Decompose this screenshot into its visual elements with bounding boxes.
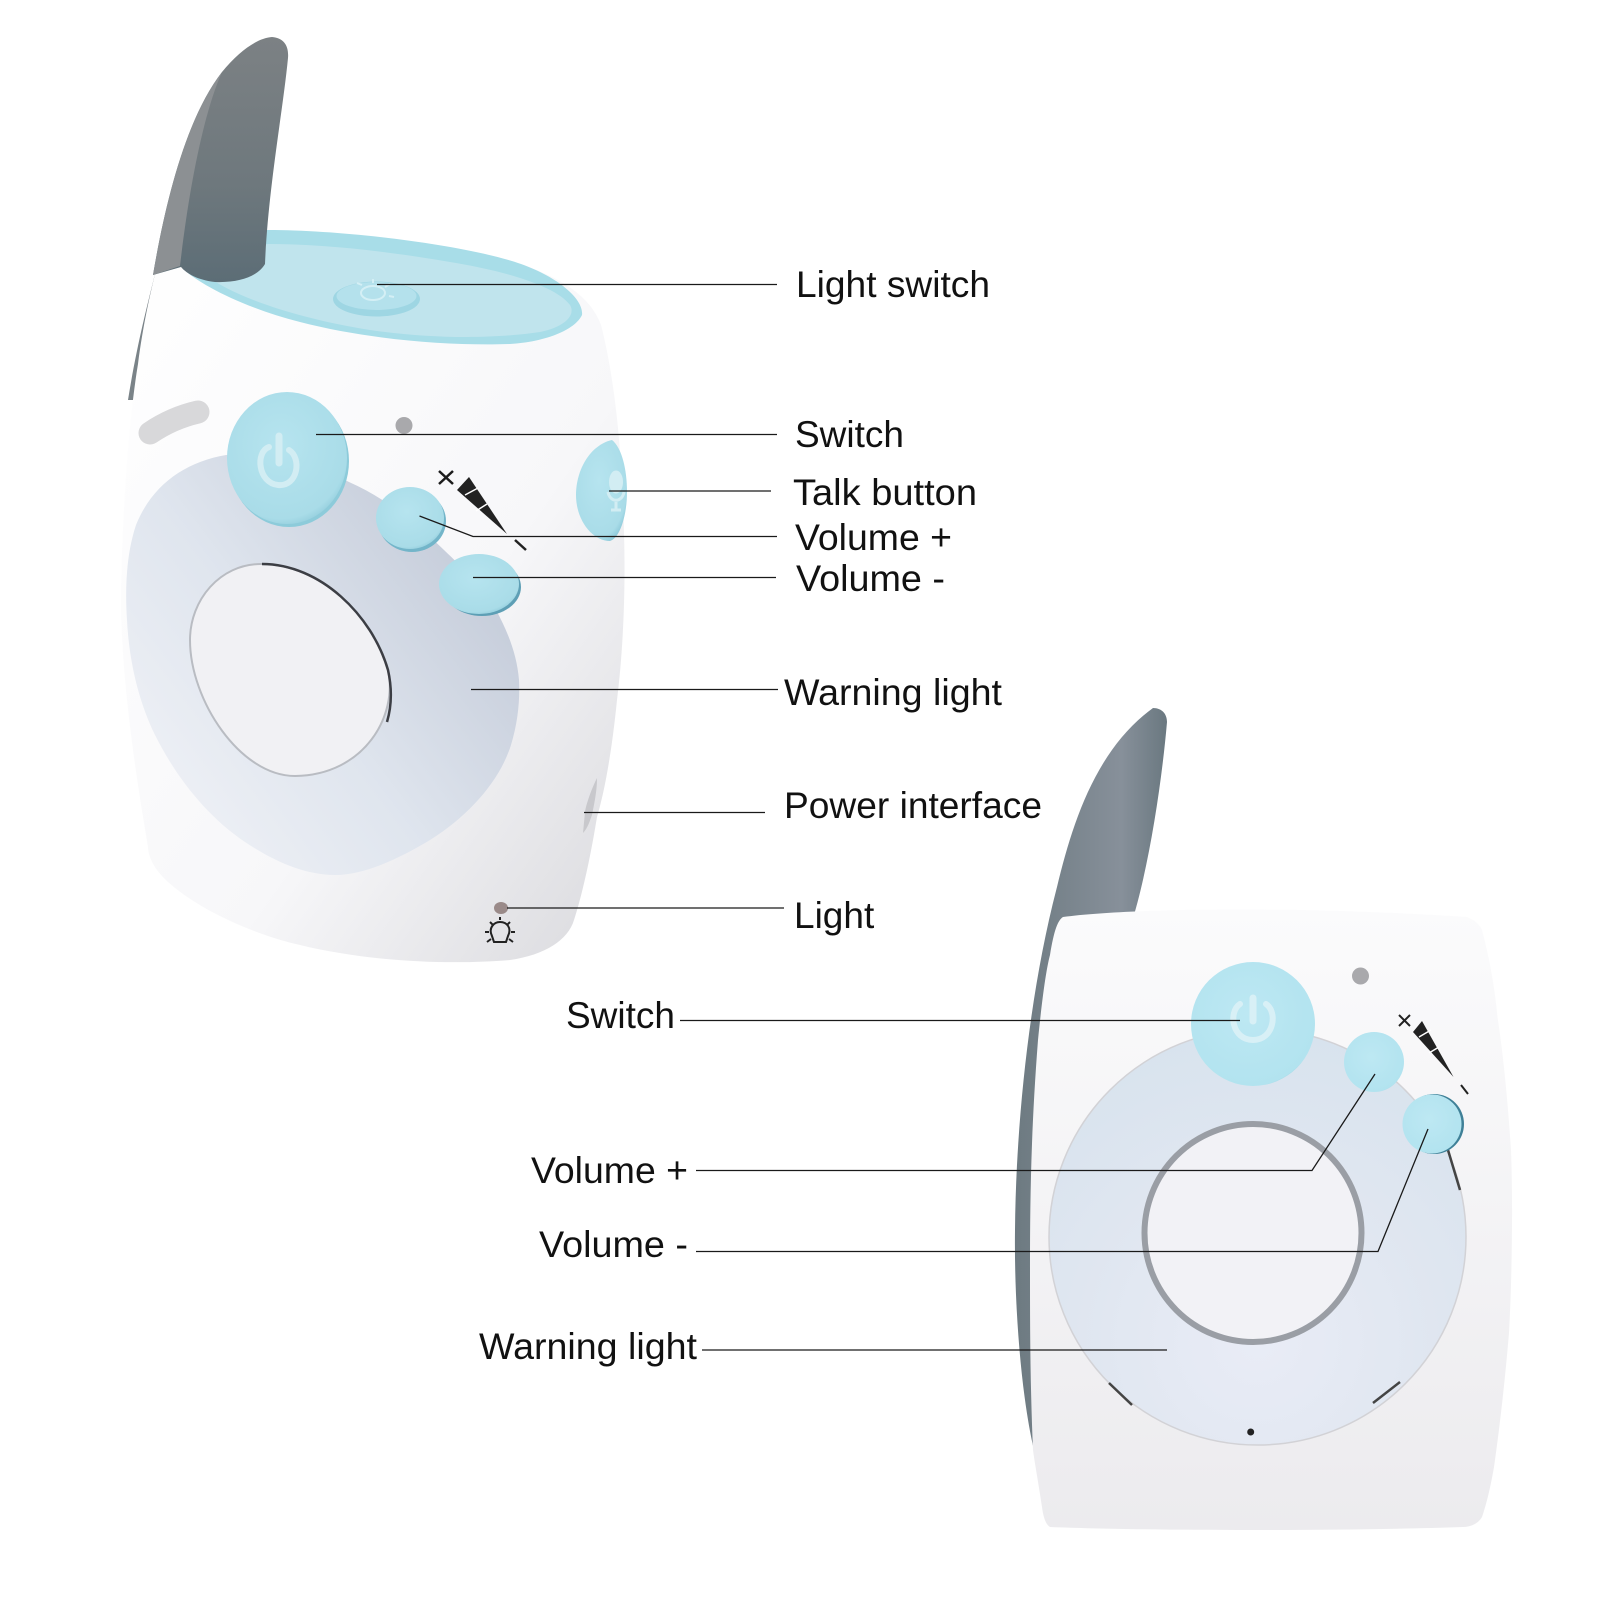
talk button — [576, 440, 627, 541]
warning light ring — [126, 455, 519, 875]
label: Volume -: Volume - — [796, 558, 945, 599]
label: Volume - (front view) — [539, 1129, 1428, 1265]
speaker disc — [1144, 1124, 1362, 1342]
icon: microphone — [608, 472, 624, 510]
power interface slot — [583, 778, 597, 833]
icon: power — [1233, 998, 1273, 1040]
volume scale icon — [439, 471, 526, 550]
antenna — [1015, 708, 1167, 1450]
label: Switch: Switch — [795, 414, 904, 455]
label: Volume + — [420, 516, 952, 558]
speaker dark gap — [262, 564, 391, 722]
label: Light: Light — [794, 895, 875, 936]
label: Talk button: Talk button — [793, 472, 977, 513]
indicator LED — [396, 417, 412, 434]
body shell — [1030, 909, 1512, 1530]
power button — [1191, 962, 1315, 1086]
label: Switch (front view): Switch — [566, 995, 675, 1036]
speaker hole dot — [1247, 1428, 1254, 1436]
volume minus button — [1402, 1094, 1464, 1154]
body shell — [121, 241, 625, 962]
ring gaps — [1109, 1150, 1460, 1405]
light sensor — [494, 902, 508, 914]
volume plus button — [376, 487, 446, 552]
icon: sun bulb — [485, 917, 515, 942]
label: Power interface: Power interface — [784, 785, 1042, 826]
icon: light bulb — [357, 279, 394, 300]
device: angled view of baby monitor — [121, 37, 627, 962]
power button — [227, 392, 349, 527]
warning light ring — [1049, 1029, 1466, 1445]
side light strip — [150, 412, 198, 433]
label: Volume - (front view): Volume - — [539, 1224, 688, 1265]
volume plus button — [1344, 1032, 1404, 1092]
top cap inner panel — [205, 244, 572, 337]
volume scale icon — [1399, 1015, 1468, 1094]
label: Warning light (front view): Warning light — [479, 1326, 698, 1367]
top cap — [182, 230, 582, 344]
light switch button — [333, 279, 420, 316]
speaker disc — [190, 564, 390, 776]
label: Volume + (front view) — [531, 1074, 1375, 1191]
antenna — [153, 37, 288, 282]
label: Light switch: Light switch — [796, 264, 990, 305]
back shell edge — [128, 274, 160, 400]
label: Warning light: Warning light — [784, 672, 1003, 713]
label: Volume +: Volume + — [795, 517, 952, 558]
icon: power — [260, 436, 297, 485]
volume minus button — [439, 554, 521, 616]
device: front view of baby monitor — [1015, 708, 1512, 1530]
indicator LED — [1352, 968, 1369, 984]
label: Volume + (front view): Volume + — [531, 1150, 688, 1191]
